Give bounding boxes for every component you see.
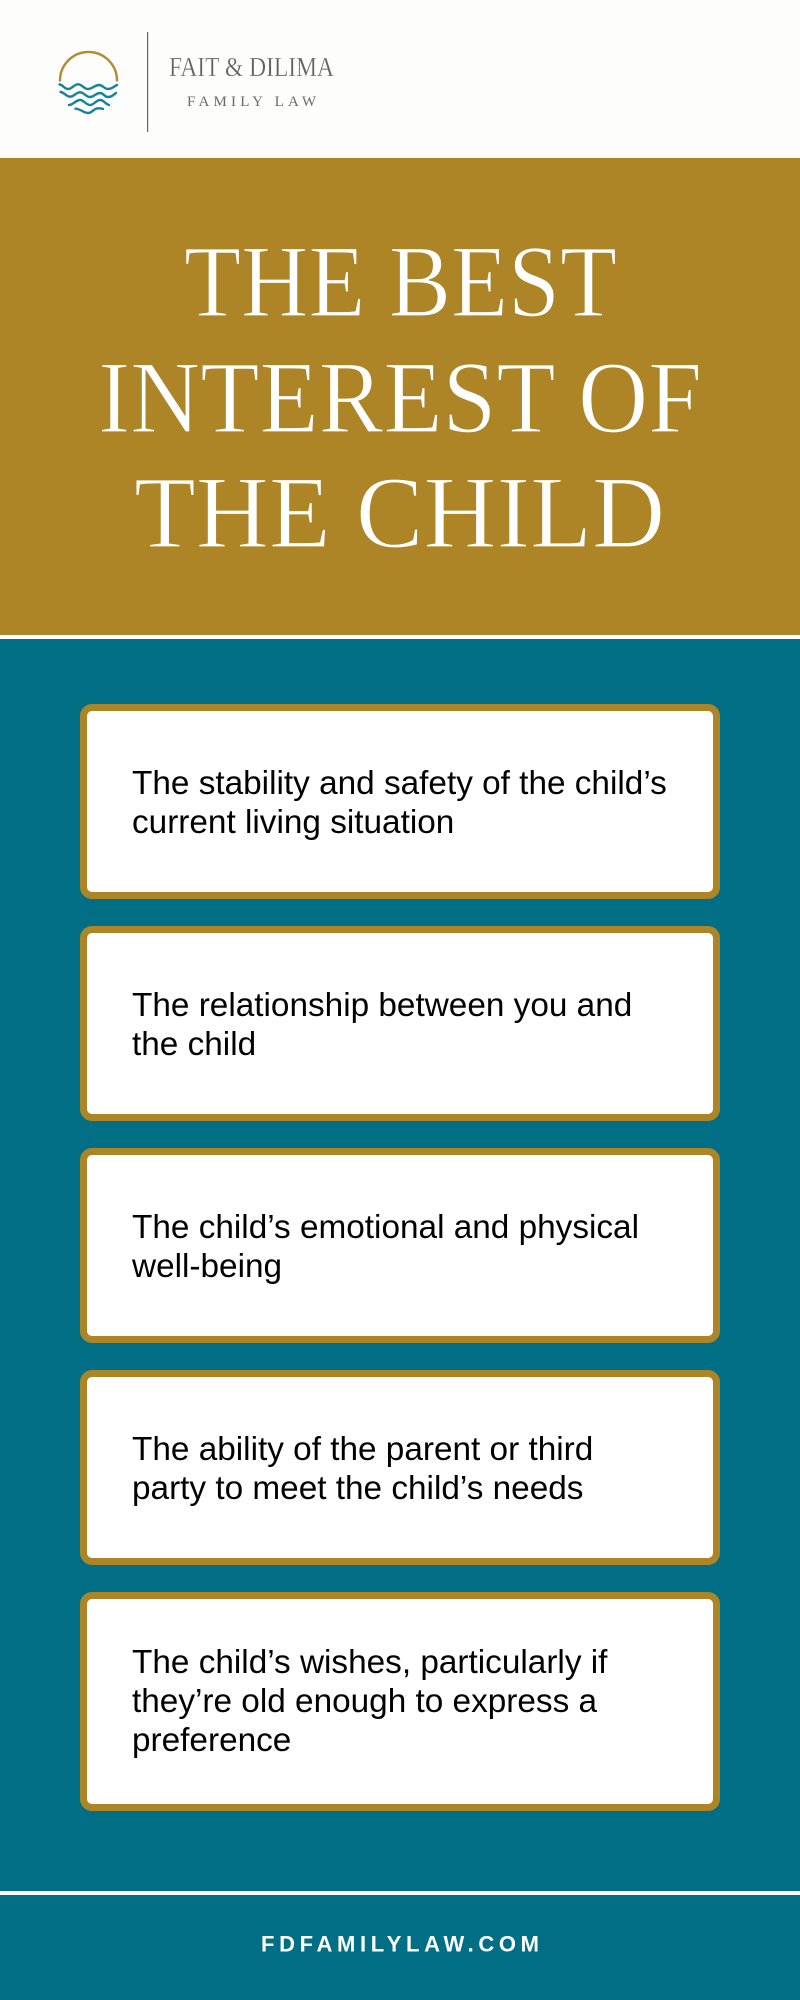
card 1: current living situation — [132, 804, 454, 840]
card 5: they’re old enough to express a — [132, 1683, 597, 1720]
card 3: well-being — [132, 1248, 282, 1284]
title: THE CHILD — [134, 456, 665, 570]
card 5 — [80, 1592, 720, 1811]
card 2: The relationship between you and — [132, 986, 632, 1024]
card 3: The child’s emotional and physical — [132, 1208, 639, 1246]
card 4 — [80, 1370, 720, 1565]
card 4: The ability of the parent or third — [132, 1430, 593, 1468]
logo — [58, 32, 334, 132]
title — [98, 225, 702, 570]
card 2 — [80, 926, 720, 1121]
white rule under title — [0, 635, 800, 639]
card 3 — [80, 1148, 720, 1343]
card 1: The stability and safety of the child’s — [132, 764, 667, 802]
title: INTEREST OF — [98, 341, 702, 455]
card 5: The child’s wishes, particularly if — [132, 1644, 607, 1681]
header logo band — [0, 0, 800, 158]
logo subtitle: FAMILY LAW — [187, 94, 317, 110]
title: THE BEST — [184, 225, 617, 339]
card 1 — [80, 704, 720, 899]
footer url: FDFAMILYLAW.COM — [261, 1932, 539, 1956]
card 5: preference — [132, 1722, 291, 1759]
icon: sun and waves — [60, 52, 117, 113]
logo divider — [147, 32, 148, 132]
card 4: party to meet the child’s needs — [132, 1470, 583, 1506]
white rule above footer — [0, 1891, 800, 1895]
card 2: the child — [132, 1026, 256, 1062]
title band — [0, 158, 800, 635]
logo name: FAIT & DILIMA — [169, 52, 334, 82]
